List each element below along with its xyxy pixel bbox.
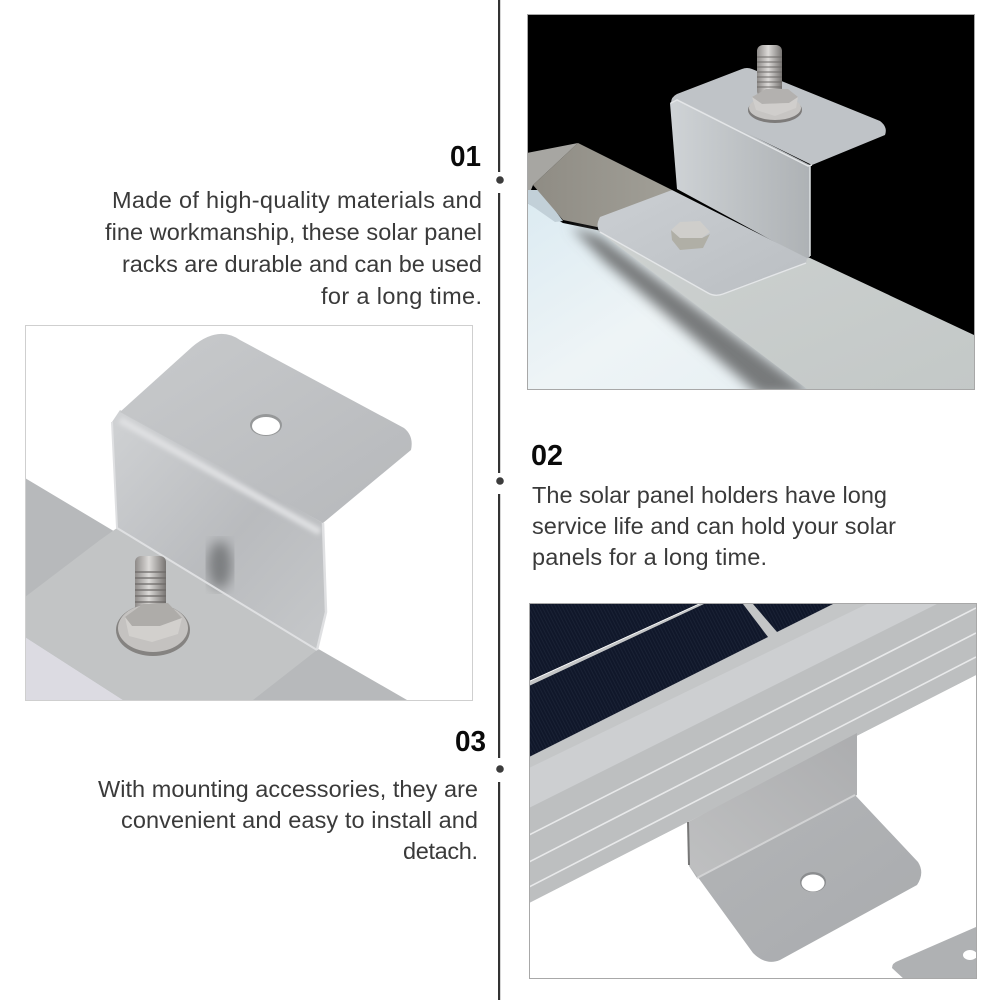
section 03 heading: 03 xyxy=(455,726,486,758)
rail xyxy=(25,478,407,700)
timeline: vertical line with dots xyxy=(496,0,504,1000)
section 01 text xyxy=(105,187,482,309)
photo 2: bracket with stud on white background xyxy=(25,326,472,700)
section 02 text: service life and can hold your solar xyxy=(532,513,896,539)
threaded stud xyxy=(135,556,166,608)
section 02 text: The solar panel holders have long xyxy=(532,482,887,508)
photo 1: bracket with bolts on black background xyxy=(527,14,974,395)
flange nut xyxy=(748,89,802,123)
section 03 text: convenient and easy to install and xyxy=(121,807,478,833)
vertical face xyxy=(670,97,810,259)
section 02 text xyxy=(532,482,896,570)
section 03 text: detach. xyxy=(403,838,478,864)
threaded stud xyxy=(757,45,782,97)
section 01 heading: 01 xyxy=(450,141,481,173)
section 03 text xyxy=(98,776,478,864)
frame grooves xyxy=(529,608,976,887)
section 02 text: panels for a long time. xyxy=(532,544,767,570)
section 01 text: Made of high-quality materials and xyxy=(112,187,482,213)
frame light band xyxy=(529,604,937,808)
bottom tab xyxy=(25,528,317,700)
bracket tab xyxy=(689,795,921,962)
second bracket corner xyxy=(892,927,976,980)
frame side xyxy=(530,675,976,902)
solar cells xyxy=(529,604,698,681)
vertical face xyxy=(112,410,326,650)
mounting hole xyxy=(800,872,826,892)
section 01 text: fine workmanship, these solar panel xyxy=(105,219,482,245)
top flange xyxy=(671,68,886,165)
photo 3: solar panel frame with bracket xyxy=(529,604,977,980)
top flange xyxy=(120,334,412,523)
bottom tab xyxy=(598,190,807,295)
flange nut xyxy=(116,603,190,656)
rail xyxy=(597,230,974,395)
bracket vertical xyxy=(688,733,857,878)
section 02 heading: 02 xyxy=(531,440,563,472)
section 01 text: for a long time. xyxy=(321,283,482,309)
section 01 text: racks are durable and can be used xyxy=(122,251,482,277)
section 03 text: With mounting accessories, they are xyxy=(98,776,478,802)
hex bolt xyxy=(671,221,710,250)
mounting hole xyxy=(250,414,282,436)
frame back xyxy=(529,604,976,903)
glass panel surface xyxy=(528,204,807,389)
